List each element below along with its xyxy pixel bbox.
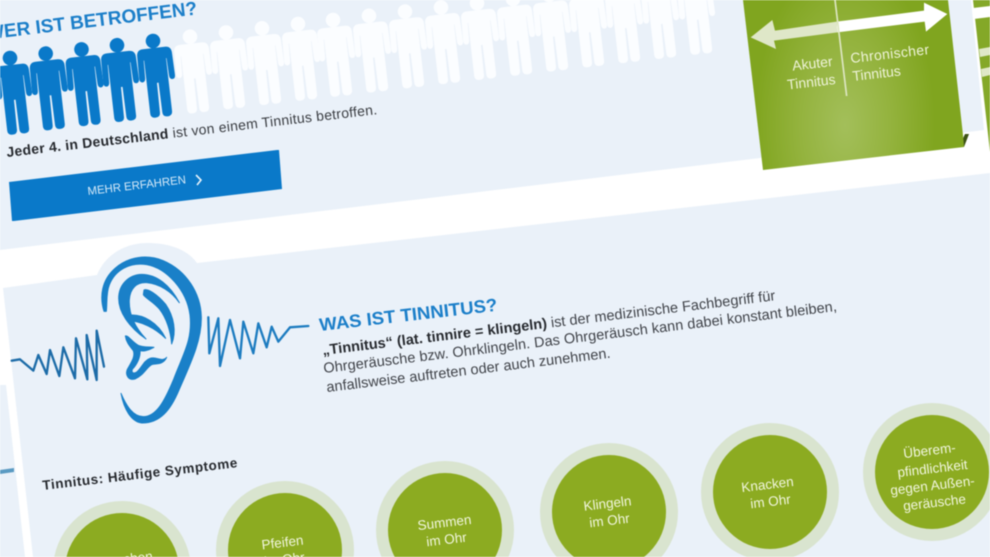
text: jeder 4. in deutschland: Jeder 4. in Deutschland ist von einem Tinnitus betroffen. bbox=[6, 101, 378, 160]
button: mehr erfahren bbox=[9, 150, 282, 221]
symptom circle: überempfindlichkeit: geräusche bbox=[902, 491, 967, 514]
heading: häufige symptome: Tinnitus: Häufige Symptome bbox=[42, 455, 238, 493]
heading: was ist tinnitus: WAS IST TINNITUS? bbox=[318, 295, 498, 335]
symptom circle: summen bbox=[376, 461, 514, 557]
text: tinnitus definition: Ohrgeräusche bzw. Ohrklingeln. Das Ohrgeräusch kann dabei konstant bleiben, bbox=[323, 299, 838, 377]
symptom circle: knacken bbox=[701, 423, 839, 557]
panel: wer ist betroffen bbox=[0, 0, 984, 250]
text: tinnitus definition: anfallsweise auftreten oder auch zunehmen. bbox=[326, 346, 611, 396]
label: chronischer tinnitus: Tinnitus bbox=[852, 63, 902, 84]
panel: neighbouring green card at right edge bbox=[973, 0, 990, 152]
symptom circle: klingeln bbox=[540, 443, 678, 557]
button: mehr erfahren: MEHR ERFAHREN bbox=[87, 174, 187, 198]
symptom circle: rauschen bbox=[53, 501, 191, 557]
symptom circle: überempfindlichkeit: Überem- bbox=[903, 440, 956, 461]
symptom circle: klingeln: Klingeln bbox=[583, 493, 632, 514]
symptom circle: pfeifen: Pfeifen bbox=[261, 533, 304, 552]
panel: was ist tinnitus bbox=[3, 173, 990, 557]
label: akuter tinnitus: Tinnitus bbox=[786, 71, 836, 92]
label: akuter tinnitus: Akuter bbox=[791, 53, 834, 74]
text: tinnitus definition: „Tinnitus“ (lat. tinnire = klingeln) ist der medizinische Fachbegriff für bbox=[322, 288, 776, 359]
symptom circle: pfeifen bbox=[216, 481, 354, 557]
symptom circle: summen: Summen bbox=[417, 512, 472, 533]
symptom circle: überempfindlichkeit: pfindlichkeit bbox=[897, 457, 969, 480]
symptom circle: klingeln: im Ohr bbox=[588, 511, 631, 530]
symptom circle: überempfindlichkeit: gegen Außen- bbox=[889, 473, 975, 498]
arrow: acute to chronic bbox=[751, 0, 947, 96]
label: chronischer tinnitus bbox=[850, 41, 930, 84]
people row: not affected, white bbox=[171, 0, 720, 115]
symptom circle: überempfindlichkeit bbox=[863, 403, 990, 541]
people row: affected, blue bbox=[0, 32, 180, 136]
panel: neighbouring panel at left edge bbox=[0, 385, 25, 557]
panel: akuter und chronischer tinnitus bbox=[743, 0, 969, 170]
label: akuter tinnitus bbox=[786, 53, 836, 92]
label: chronischer tinnitus: Chronischer bbox=[850, 41, 930, 66]
icon: ear with sound waves bbox=[12, 257, 308, 423]
symptom circle: summen: im Ohr bbox=[425, 530, 468, 549]
symptom circle: knacken: Knacken bbox=[741, 474, 794, 495]
symptom circle: knacken: im Ohr bbox=[749, 492, 792, 511]
